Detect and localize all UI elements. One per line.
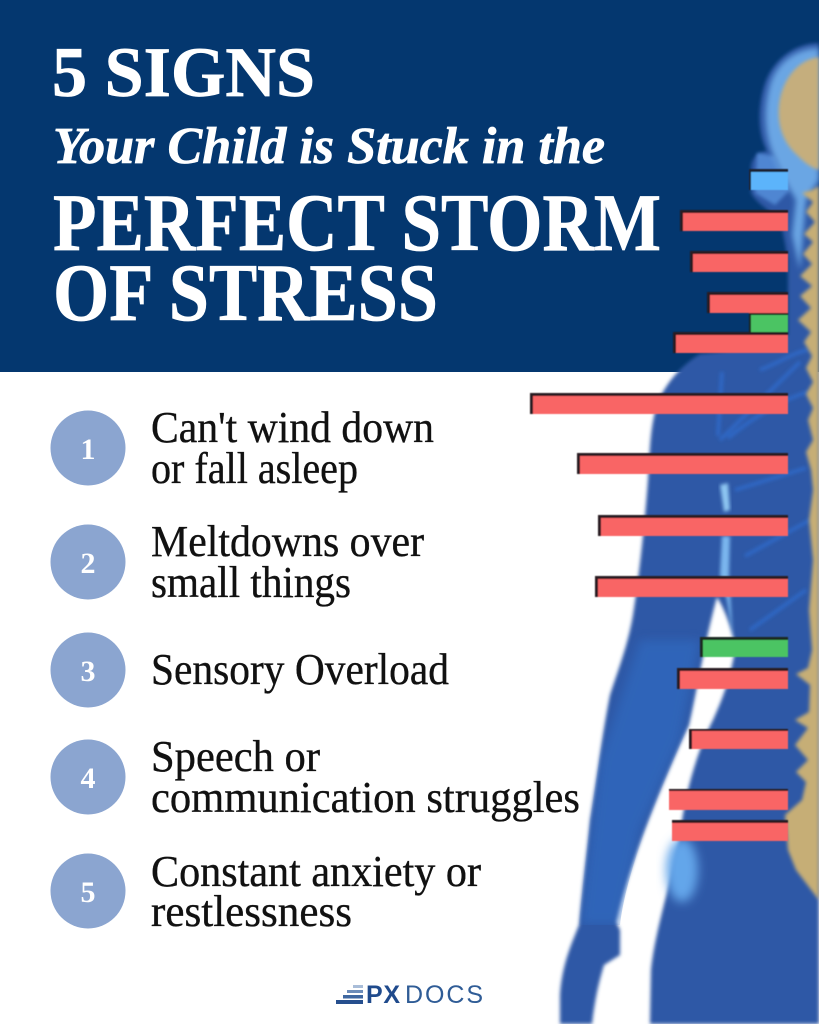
sign 1: Can't wind down [151,403,434,452]
sign 5 [50,847,481,936]
title line: Your Child is Stuck in the: Your Child is Stuck in the [53,118,605,175]
sign 1 [50,403,434,493]
head glow [766,48,819,270]
bar: red 11 [669,789,788,810]
sign 4: Speech or [151,732,320,781]
title line: PERFECT STORM: PERFECT STORM [53,177,661,268]
wordmark: PX [366,981,400,1009]
bar: red 3 [707,292,788,313]
spinal column [785,186,819,900]
sign 5: Constant anxiety or [151,847,481,896]
bar: red 2 [690,251,788,272]
sign 5: 5 [80,876,96,909]
bar: red 9 [677,668,788,689]
bar: red 7 [598,515,788,536]
bar: blue [749,169,788,190]
sign 4 [50,732,580,822]
wordmark: DOCS [405,981,483,1009]
bar: red 1 [680,210,788,231]
sign 4: 4 [80,762,96,795]
bar: red 12 [672,820,788,841]
nerve bars chart [530,169,788,841]
bar: red 6 [577,453,788,474]
header band [0,0,819,372]
anatomical figure [560,43,819,1024]
bar: red 5 [530,393,788,414]
sign 3 [50,632,449,708]
nose and chin [755,153,790,205]
bar: green 1 [749,313,788,333]
sign 2 [50,517,424,607]
brain [779,57,819,170]
bar: red 10 [689,729,788,749]
logo: PX DOCS [336,981,483,1009]
icon: stacked steps [336,985,363,1004]
body silhouette [560,43,819,1024]
bar: green 2 [700,637,788,657]
bar: red 4 [673,332,788,353]
sign 5: restlessness [151,887,352,936]
sign 3: 3 [80,655,96,688]
muscle streaks [718,350,810,630]
sign 1: 1 [80,433,96,466]
bar: red 8 [595,576,788,597]
chest highlight [720,483,730,512]
list of signs [50,403,580,936]
sign 2: Meltdowns over [151,517,424,566]
sternum highlight [720,536,733,640]
title line: OF STRESS: OF STRESS [53,247,438,338]
sign 2: small things [151,558,351,607]
sign 2: 2 [80,547,96,580]
title [52,34,661,338]
sign 1: or fall asleep [151,444,358,493]
title line: 5 SIGNS: 5 SIGNS [52,34,315,112]
sign 3: Sensory Overload [151,645,449,694]
hip highlight [666,838,698,902]
sign 4: communication struggles [151,773,580,822]
arm highlight [580,640,700,925]
